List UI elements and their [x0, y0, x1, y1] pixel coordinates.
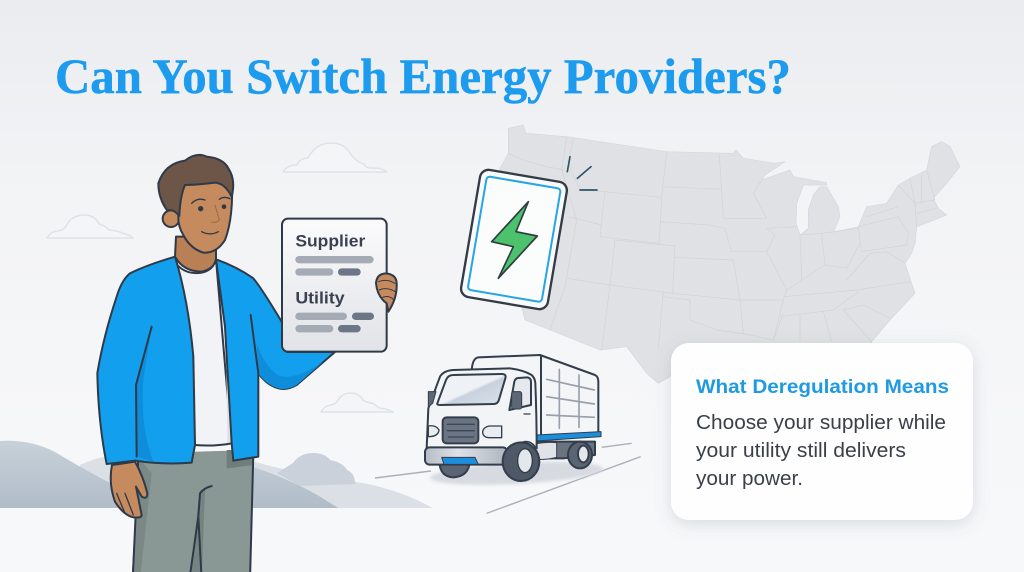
rear wheel: [568, 442, 592, 468]
neck: [175, 237, 216, 272]
left front wheel: [439, 462, 470, 477]
truck: [425, 355, 601, 481]
jacket right and arm: [216, 259, 335, 461]
US map: [500, 125, 960, 383]
truck cargo box: [472, 355, 601, 441]
head: [158, 155, 233, 253]
shirt: [177, 259, 232, 446]
document: [282, 219, 387, 352]
background clouds: [47, 143, 393, 412]
document: Utility: [295, 289, 345, 308]
trousers: [132, 450, 253, 572]
card: [460, 169, 568, 310]
callout body: [696, 412, 946, 490]
callout body: your utility still delivers: [696, 440, 906, 462]
truck cab: [425, 368, 537, 465]
hair: [158, 155, 233, 216]
person: [97, 155, 397, 572]
spark lines: [567, 157, 597, 190]
holding fingers: [376, 273, 397, 312]
callout: [671, 343, 973, 520]
icon: lightning bolt: [492, 202, 537, 278]
callout body: Choose your supplier while: [696, 412, 946, 434]
title: Can You Switch Energy Providers?: [55, 48, 791, 104]
battery card with lightning bolt: [460, 157, 597, 310]
road edge line: [375, 471, 431, 478]
callout body: your power.: [696, 468, 803, 490]
callout heading: What Deregulation Means: [696, 376, 949, 398]
document: Supplier: [295, 232, 366, 251]
front wheel: [503, 442, 539, 481]
jacket left: [97, 257, 195, 464]
hand: [111, 462, 147, 518]
inner border: [468, 176, 561, 302]
chassis: [535, 442, 595, 458]
hills: [0, 441, 433, 508]
road and truck shadow: [430, 443, 641, 513]
